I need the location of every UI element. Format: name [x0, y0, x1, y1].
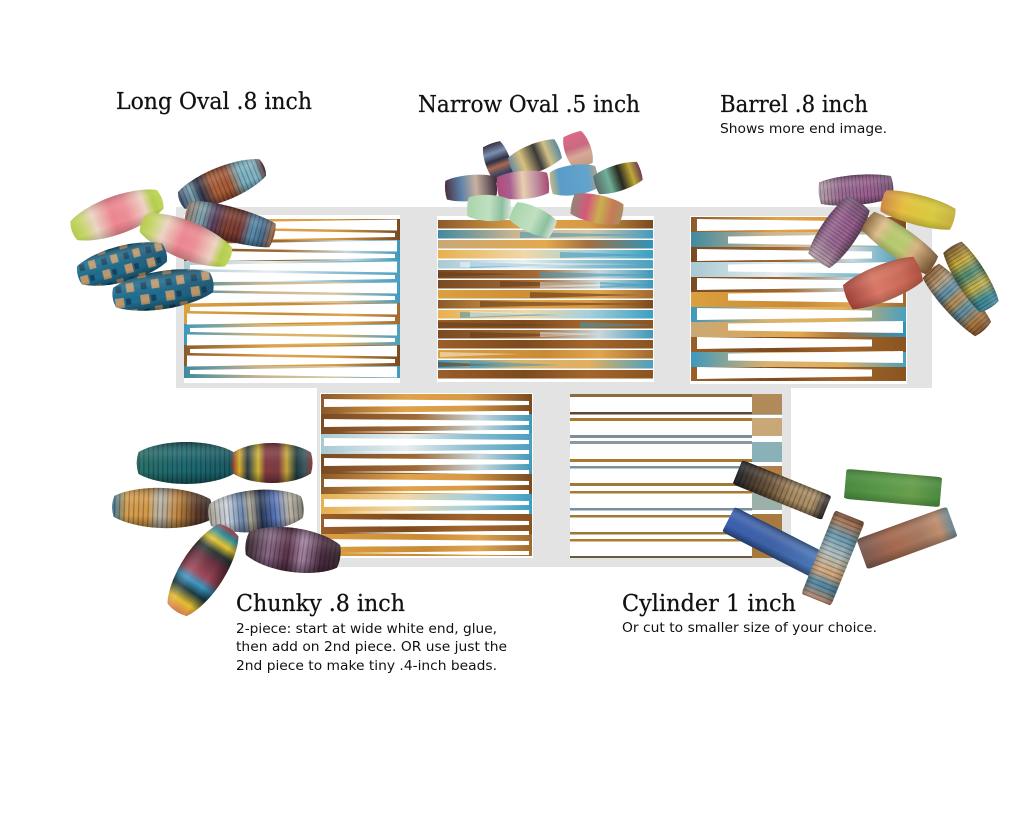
template sheet: long oval	[184, 215, 400, 383]
template sheet: narrow oval	[437, 216, 654, 382]
beads: long oval group	[66, 151, 279, 317]
template sheet: cylinder	[570, 394, 782, 558]
heading: barrel: Barrel .8 inch	[720, 92, 868, 118]
note: barrel: Shows more end image.	[720, 122, 887, 137]
beads: narrow oval group	[444, 129, 645, 241]
template sheet: chunky	[320, 393, 533, 558]
heading: cylinder: Cylinder 1 inch	[622, 591, 796, 617]
panel: bottom gray backdrop	[317, 388, 791, 567]
heading: chunky: Chunky .8 inch	[236, 591, 405, 617]
note: chunky: 2nd piece to make tiny .4-inch beads.	[236, 659, 497, 674]
beads: cylinder group	[722, 460, 958, 606]
note: cylinder: Or cut to smaller size of your choice.	[622, 621, 877, 636]
note: chunky	[236, 622, 507, 674]
heading: long oval: Long Oval .8 inch	[116, 89, 312, 115]
beads: barrel group	[803, 172, 1003, 340]
beads: chunky group	[111, 442, 343, 623]
note: chunky: 2-piece: start at wide white end, glue,	[236, 622, 497, 637]
template sheet: barrel	[690, 216, 907, 384]
panel: top gray backdrop	[176, 207, 932, 388]
note: chunky: then add on 2nd piece. OR use just the	[236, 640, 507, 655]
heading: narrow oval: Narrow Oval .5 inch	[418, 92, 640, 118]
